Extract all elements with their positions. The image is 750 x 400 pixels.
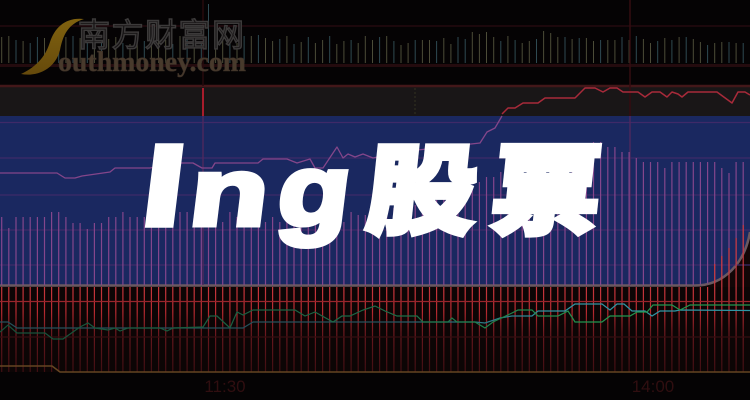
axis label 11:30: 11:30	[204, 377, 246, 396]
volume bars lower red	[2, 225, 743, 372]
grey chart strip	[0, 87, 750, 117]
teal indicator line	[0, 304, 750, 328]
title letter n: n	[184, 139, 276, 246]
crosshair vertical lines upper	[203, 0, 630, 116]
orange indicator line	[0, 366, 750, 372]
title letter g: g	[272, 135, 358, 247]
price line	[0, 116, 502, 178]
volume bars in band	[2, 142, 743, 286]
title: 票	[486, 139, 607, 248]
volume bars top teal	[16, 4, 743, 63]
volume bars top olive	[2, 31, 736, 63]
top grid lines	[0, 26, 750, 86]
band grid lines	[0, 122, 750, 265]
title	[130, 124, 607, 252]
price line upper	[502, 88, 750, 114]
band vertical lines	[203, 116, 630, 285]
band edge highlight	[0, 232, 750, 286]
green indicator line	[0, 305, 750, 339]
watermark logo	[21, 17, 246, 78]
dark lower chart fill	[0, 286, 750, 372]
watermark url: outhmoney.com	[58, 47, 246, 78]
title characters: 股	[362, 139, 483, 248]
axis label 14:00: 14:00	[632, 377, 674, 396]
logo swoosh	[21, 19, 84, 75]
blue band	[0, 116, 750, 285]
red chart corner glow	[690, 225, 750, 287]
watermark chinese name: 南方财富网	[78, 17, 246, 53]
title letter l: l	[130, 124, 198, 252]
lower grid lines	[0, 302, 750, 337]
